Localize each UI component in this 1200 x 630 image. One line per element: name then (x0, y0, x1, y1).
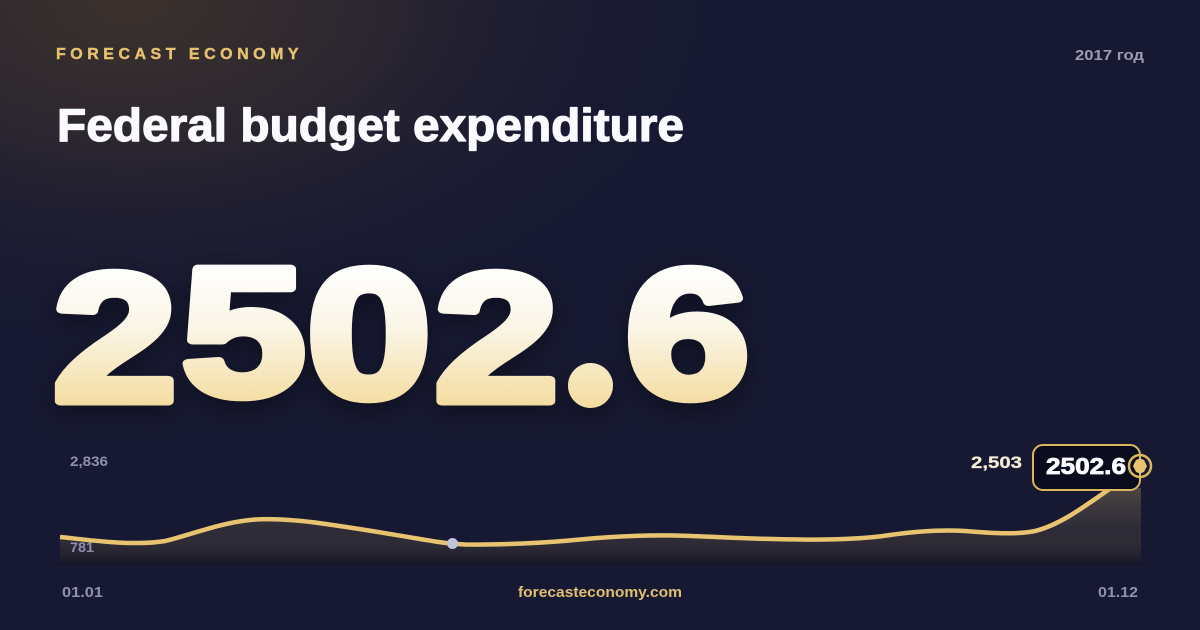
chart: area line (60, 488, 1141, 565)
value callout (1033, 445, 1140, 490)
main value: 6 (625, 232, 750, 436)
main value (53, 230, 750, 440)
axis label: min: 781 (70, 539, 94, 555)
axis label: max: 2,836 (70, 453, 108, 469)
start date: 01.01 (62, 584, 103, 601)
title: Federal budget expenditure (57, 99, 684, 151)
chart area fill (60, 488, 1141, 565)
main value: 2 (434, 236, 559, 440)
current value label: 2,503 (971, 453, 1022, 472)
main value: 2 (53, 236, 177, 440)
main value: 5 (181, 230, 306, 434)
main value: . (569, 277, 613, 423)
chart line (60, 488, 1111, 545)
main value: 0 (307, 232, 431, 436)
site url: forecasteconomy.com (518, 584, 682, 601)
brand label: FORECAST ECONOMY (56, 46, 303, 63)
low point marker (447, 538, 458, 549)
value callout: 2502.6 (1046, 453, 1126, 479)
end date: 01.12 (1098, 584, 1138, 601)
current point marker (1129, 455, 1151, 477)
year label: 2017 год (1075, 47, 1145, 64)
